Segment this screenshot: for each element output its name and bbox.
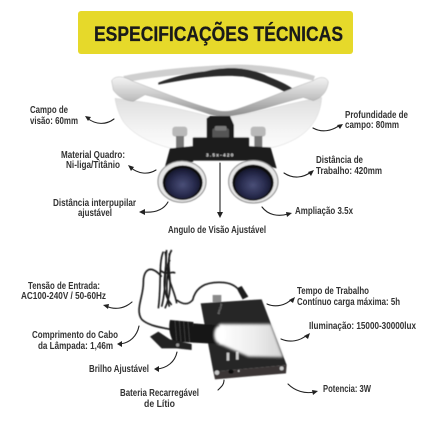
arrow: profundidade de campo [313,124,343,131]
photo: headlamp with battery box: BRIGHT [216,302,224,315]
label: profundidade de campo: Profundidade de [345,109,408,121]
label: brilho ajustável: Brilho Ajustável [89,363,149,375]
label: ampliação: Ampliação 3.5x [295,205,353,217]
label: distância interpupilar: ajustável [78,207,112,219]
arrow: ângulo de visão [217,163,223,218]
label: tensão de entrada: AC100-240V / 50-60Hz [21,290,106,302]
label: material quadro [61,149,125,171]
label: comprimento do cabo [32,329,118,352]
arrow: comprimento do cabo [117,326,139,347]
label: distância interpupilar: Distância interpupilar [53,197,136,209]
label: tensão de entrada [21,280,106,302]
label: tempo de trabalho [297,285,400,308]
arrow: bateria recarregável [218,380,224,390]
lamp [193,323,219,344]
label: distância de trabalho [316,154,382,177]
arrow: campo de visão [85,116,114,123]
title banner [78,11,353,54]
label: ângulo de visão: Angulo de Visão Ajustável [168,224,266,236]
label: material quadro: Ni-liga/Titânio [66,159,120,171]
callout arrows [85,116,343,395]
label: distância interpupilar [53,197,136,219]
label: bateria recarregável: de Lítio [144,398,175,410]
battery box body [201,299,287,372]
arrow: tempo de trabalho [267,297,295,306]
label: tensão de entrada: Tensão de Entrada: [28,280,100,292]
arrow: distância de trabalho [284,170,314,177]
arrow: material quadro [128,165,156,173]
label: bateria recarregável [120,387,199,410]
label: comprimento do cabo: da Lâmpada: 1,46m [38,340,113,352]
label: bateria recarregável: Bateria Recarregável [120,387,199,399]
label: comprimento do cabo: Comprimento do Cabo [32,329,118,341]
photo: headlamp with battery box [139,250,287,379]
photo: dental loupe glasses: 3.5x-420 [206,153,234,158]
label: distância de trabalho: Trabalho: 420mm [316,165,382,177]
photo: dental loupe glasses [112,65,328,203]
arrow: distância interpupilar [139,202,168,215]
arrow: potência [288,384,318,395]
arrow: brilho ajustável [154,352,177,372]
label: profundidade de campo: campo: 80mm [345,119,399,131]
arrow: ampliação [262,207,292,217]
text labels [21,104,416,410]
label: campo de visão [30,104,78,127]
arrow: iluminação [281,333,310,341]
label: tempo de trabalho: Tempo de Trabalho [297,285,369,297]
label: material quadro: Material Quadro: [61,149,125,161]
label: campo de visão: visão: 60mm [30,115,78,127]
title banner: ESPECIFICAÇÕES TÉCNICAS [94,22,343,46]
label: potência: Potencia: 3W [323,383,371,395]
arrow: tensão de entrada [103,302,132,309]
label: distância de trabalho: Distância de [316,154,363,166]
label: campo de visão: Campo de [30,104,68,116]
light beam [219,324,283,357]
label: tempo de trabalho: Contínuo carga máxima: 5h [297,296,400,308]
label: profundidade de campo [345,109,408,131]
